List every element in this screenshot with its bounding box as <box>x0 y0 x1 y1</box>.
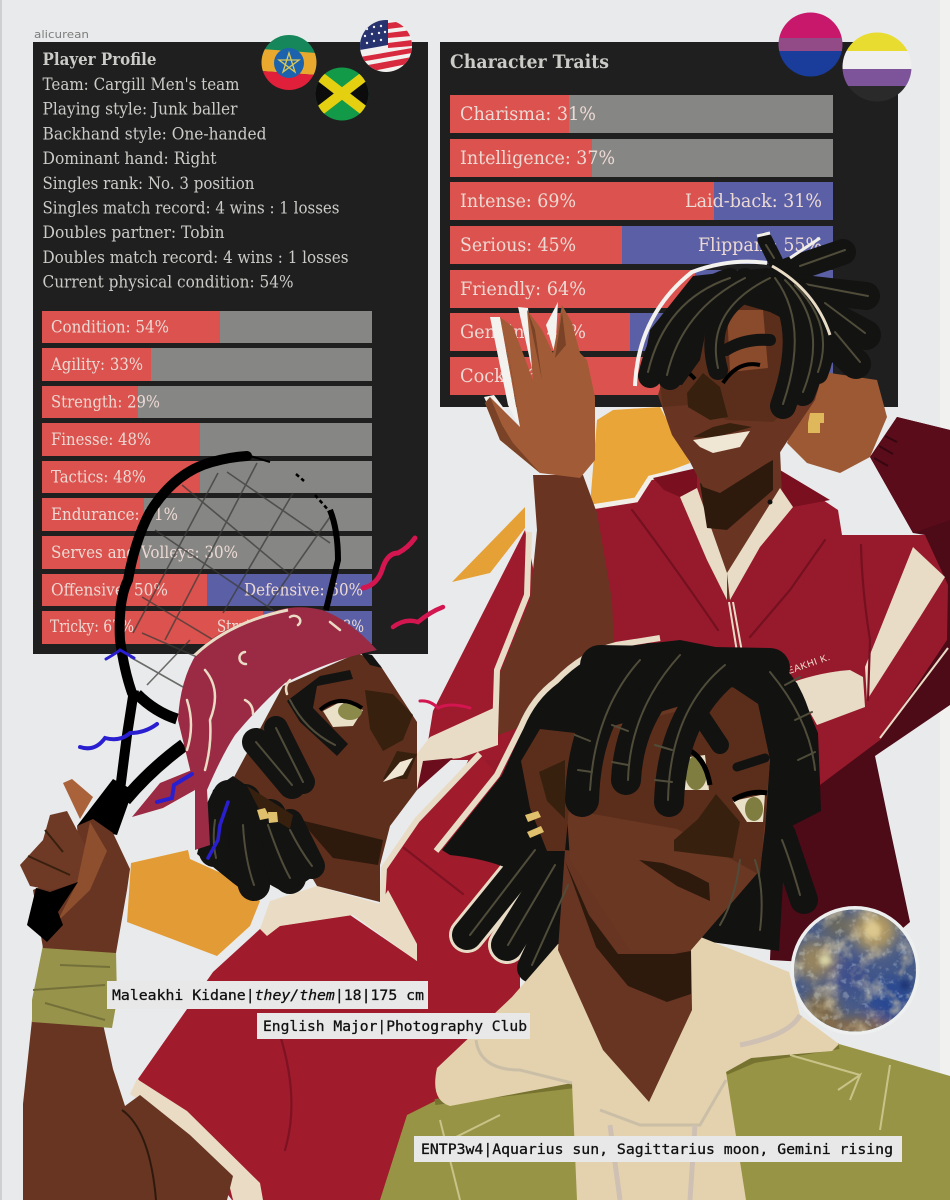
label: major and club <box>257 1013 530 1039</box>
profile details: Current physical condition: 54% <box>42 273 294 293</box>
shirt <box>138 915 620 1200</box>
icon: bisexual flag <box>778 12 844 78</box>
label: personality and astrology: ENTP3w4|Aquarius sun, Sagittarius moon, Gemini rising <box>421 1141 893 1158</box>
raised far arm and dark back panel <box>770 417 950 965</box>
eyes <box>682 748 767 822</box>
back hair <box>765 240 866 364</box>
stat bars: Tricky: 67% <box>50 617 134 636</box>
stat bars: Strength: 29% <box>51 392 160 412</box>
shirt cream sleeve band <box>130 1079 263 1200</box>
artist signature: alicurean <box>34 28 89 41</box>
bandana <box>178 607 377 850</box>
bandana marks <box>187 616 340 770</box>
racket throat and handle <box>77 690 184 835</box>
panel: character traits <box>440 42 898 407</box>
panel: player profile <box>33 42 428 654</box>
trait bars: Friendly: 64% <box>460 278 586 300</box>
closed eyes <box>673 364 760 383</box>
red jacket front panel <box>380 755 520 1060</box>
trait bars <box>450 95 833 395</box>
eye <box>320 701 363 727</box>
side hair <box>197 652 382 901</box>
stat bars: Serves and Volleys: 30% <box>51 543 238 562</box>
stat bars: Endurance: 31% <box>51 505 178 524</box>
hair outline <box>635 262 767 386</box>
lower hair lobes with cream outline <box>467 835 804 968</box>
stat bars: Agility: 33% <box>50 355 143 374</box>
racket strings <box>130 463 330 687</box>
hair braid lines <box>648 278 823 404</box>
trait bars: Cocky: 60% <box>460 365 566 387</box>
smile <box>693 423 752 453</box>
heading: player profile: Player Profile <box>42 50 157 70</box>
nose shadow <box>687 373 728 420</box>
embroidered name: LEAKHI K. <box>780 652 832 679</box>
earrings <box>525 811 544 838</box>
earrings <box>257 808 278 823</box>
image: planet Mercury <box>790 906 920 1038</box>
back hair <box>442 640 821 951</box>
stat bars: Offensive: 50% <box>51 580 168 600</box>
label: name and stats <box>107 981 428 1009</box>
neck shadow <box>565 861 691 1002</box>
label: name and stats: Maleakhi Kidane|they/them|18|175 cm <box>112 987 424 1004</box>
profile details: Playing style: Junk baller <box>42 100 238 120</box>
profile details: Backhand style: One-handed <box>42 124 267 144</box>
trait bars: Intelligence: 37% <box>460 147 615 169</box>
figure: left, with racket <box>20 455 620 1200</box>
profile details <box>42 75 348 293</box>
olive jacket <box>380 1044 950 1200</box>
cream hoodie <box>435 936 839 1200</box>
near arm <box>498 475 614 735</box>
trait bars: Intense: 69% <box>460 190 576 212</box>
trait bars: Genuine: 47% <box>460 321 586 343</box>
stat bars: Defensive: 50% <box>244 580 363 600</box>
racket frame <box>120 456 247 693</box>
profile details: Singles rank: No. 3 position <box>42 174 255 194</box>
front hair <box>640 268 832 406</box>
arm <box>23 1020 233 1200</box>
face <box>567 684 770 950</box>
squiggle accents <box>80 538 470 858</box>
jacket creases <box>632 510 870 700</box>
face <box>658 280 825 493</box>
profile details: Team: Cargill Men's team <box>42 75 240 95</box>
icon: USA flag <box>360 20 412 72</box>
racket <box>77 455 338 835</box>
earring <box>808 413 824 433</box>
braid lines <box>470 655 815 965</box>
red jacket <box>450 468 948 800</box>
jacket outline <box>585 470 682 508</box>
trait bars: Serious: 45% <box>460 234 576 256</box>
icon: Ethiopia flag <box>261 35 317 91</box>
sleeve on raised arm <box>870 417 950 533</box>
mouth <box>639 860 710 901</box>
left jacket sleeve <box>425 530 540 760</box>
figure: bottom front, olive jacket <box>380 638 950 1200</box>
jacket cream panels <box>412 547 945 790</box>
profile details: Dominant hand: Right <box>42 149 217 169</box>
stat bars: Condition: 54% <box>51 318 169 336</box>
profile details: Doubles match record: 4 wins : 1 losses <box>42 248 348 268</box>
heading: character traits: Character Traits <box>450 51 609 73</box>
stat bars: Tactics: 48% <box>51 468 146 486</box>
trait bars: Laid-back: 31% <box>685 190 822 212</box>
nose shadow <box>674 794 740 858</box>
raised hand <box>484 302 595 478</box>
icon: nonbinary flag <box>842 32 912 103</box>
hair outline <box>436 638 660 851</box>
neck <box>558 850 760 1102</box>
neck shadow <box>300 820 383 865</box>
icon: Jamaica flag <box>315 67 369 121</box>
bandana tail <box>132 770 195 817</box>
braid lines <box>214 700 335 885</box>
ear <box>247 786 293 829</box>
wristband <box>32 945 117 1028</box>
stat bars: Finesse: 48% <box>51 430 151 449</box>
nose shadow <box>365 690 413 751</box>
orange background shapes <box>127 407 690 956</box>
label: personality and astrology <box>414 1136 902 1162</box>
head <box>233 653 417 902</box>
profile details: Doubles partner: Tobin <box>42 223 225 243</box>
front hair strands <box>582 660 804 802</box>
stat bars: Straightforward: 33% <box>217 617 364 636</box>
hand <box>20 779 130 953</box>
trait bars: Charisma: 31% <box>460 103 596 125</box>
collar <box>260 886 417 961</box>
lips <box>383 751 417 782</box>
ear <box>521 729 575 851</box>
collar <box>653 450 830 652</box>
profile details: Singles match record: 4 wins : 1 losses <box>42 198 340 218</box>
hand behind head <box>787 370 887 473</box>
trait bars: Flippant: 55% <box>698 234 822 256</box>
label: major and club: English Major|Photography Club <box>263 1018 527 1035</box>
figure: top, waving <box>412 233 950 965</box>
stat bars <box>42 311 372 644</box>
